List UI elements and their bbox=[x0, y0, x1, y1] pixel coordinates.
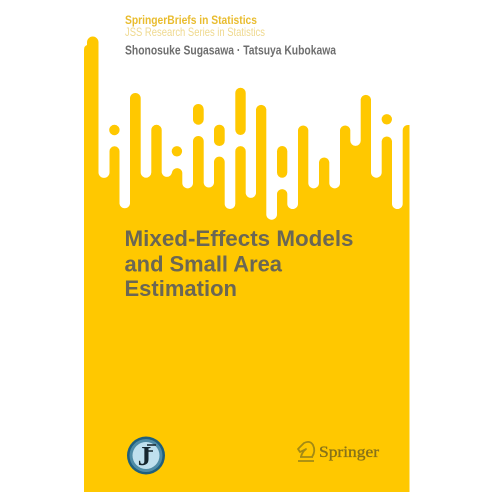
subseries title: JSS Research Series in Statistics bbox=[125, 25, 265, 39]
book title: Mixed-Effects Models bbox=[124, 226, 354, 251]
book title: and Small Area bbox=[124, 252, 283, 276]
Springer wordmark: Springer bbox=[319, 444, 380, 461]
icon: JSS seal: J bbox=[138, 441, 151, 471]
yellow cover with bar pattern bbox=[84, 37, 410, 492]
series title: SpringerBriefs in Statistics bbox=[125, 13, 257, 27]
book title bbox=[124, 226, 354, 301]
authors: Shonosuke Sugasawa · Tatsuya Kubokawa bbox=[125, 44, 337, 58]
icon: Springer horse bbox=[298, 442, 314, 461]
book title: Estimation bbox=[124, 276, 237, 301]
icon: JSS seal bbox=[127, 436, 165, 474]
